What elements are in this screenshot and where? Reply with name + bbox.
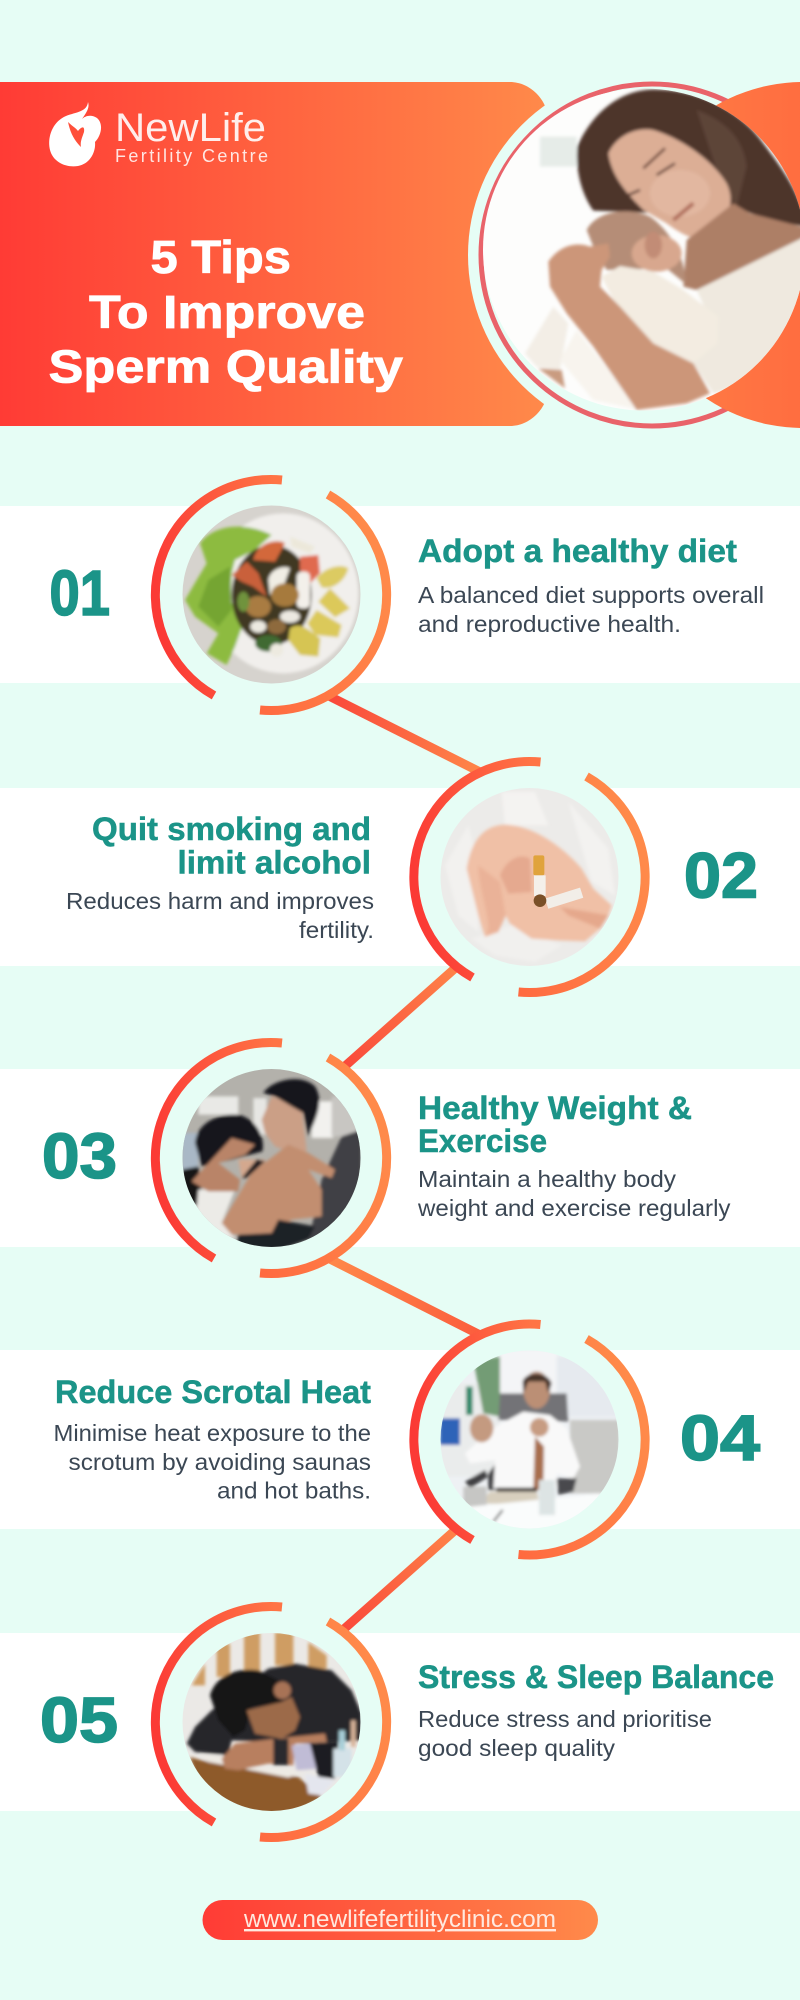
step 2 heading: limit alcohol — [178, 844, 371, 880]
step 1 heading: Adopt a healthy diet — [418, 533, 737, 569]
step 1 description: A balanced diet supports overall — [418, 582, 764, 608]
logo — [49, 102, 268, 166]
title: Sperm Quality — [48, 340, 403, 392]
step 5 heading: Stress & Sleep Balance — [418, 1659, 774, 1695]
step 2 heading: Quit smoking and — [92, 811, 371, 847]
step 3 description: weight and exercise regularly — [417, 1195, 731, 1221]
step 4 description: and hot baths. — [217, 1478, 371, 1504]
step 4 ring and photo: man in office loosening tie — [414, 1324, 646, 1556]
step 2 description — [66, 888, 374, 943]
step 3 heading: Healthy Weight & — [418, 1090, 692, 1126]
step 3 ring and photo: man lifting barbell — [155, 1042, 387, 1274]
step 5 number: 05 — [40, 1684, 118, 1756]
step 4 description: Minimise heat exposure to the — [54, 1420, 371, 1446]
step 2 number: 02 — [684, 840, 758, 912]
logo wordmark: NewLife — [115, 106, 266, 150]
step 2 description: Reduces harm and improves — [66, 888, 374, 914]
step 4 number: 04 — [680, 1402, 760, 1474]
title: To Improve — [89, 286, 365, 338]
step 4 description: scrotum by avoiding saunas — [68, 1449, 371, 1475]
step 5 description — [418, 1706, 712, 1761]
step 5 description: good sleep quality — [418, 1735, 615, 1761]
step 3 heading: Exercise — [418, 1123, 547, 1159]
logo mark — [49, 102, 101, 166]
footer website pill — [202, 1900, 598, 1940]
step 1 description — [418, 582, 764, 637]
step 1 number: 01 — [50, 557, 110, 629]
step 5 ring and photo: man asleep at desk — [155, 1606, 387, 1838]
step 3 number: 03 — [42, 1120, 117, 1192]
hero photo: mother holding baby — [468, 71, 800, 439]
step 3 heading — [418, 1090, 692, 1159]
step 3 description: Maintain a healthy body — [418, 1166, 676, 1192]
step 2 heading — [92, 811, 371, 880]
step 4 heading: Reduce Scrotal Heat — [55, 1374, 371, 1410]
step 4 description — [54, 1420, 371, 1504]
step 1 description: and reproductive health. — [418, 611, 681, 637]
white row bands — [0, 506, 800, 1811]
step 3 description — [417, 1166, 731, 1221]
header banner — [0, 82, 548, 426]
step 2 description: fertility. — [299, 917, 374, 943]
step 5 description: Reduce stress and prioritise — [418, 1706, 712, 1732]
logo tagline: Fertility Centre — [115, 146, 268, 166]
connector lines — [322, 692, 490, 1637]
step 1 ring and photo: salad — [155, 479, 387, 711]
title: 5 Tips — [150, 231, 291, 283]
footer website pill: www.newlifefertilityclinic.com — [243, 1906, 556, 1933]
title — [48, 231, 403, 392]
step 2 ring and photo: broken cigarette — [414, 761, 646, 993]
